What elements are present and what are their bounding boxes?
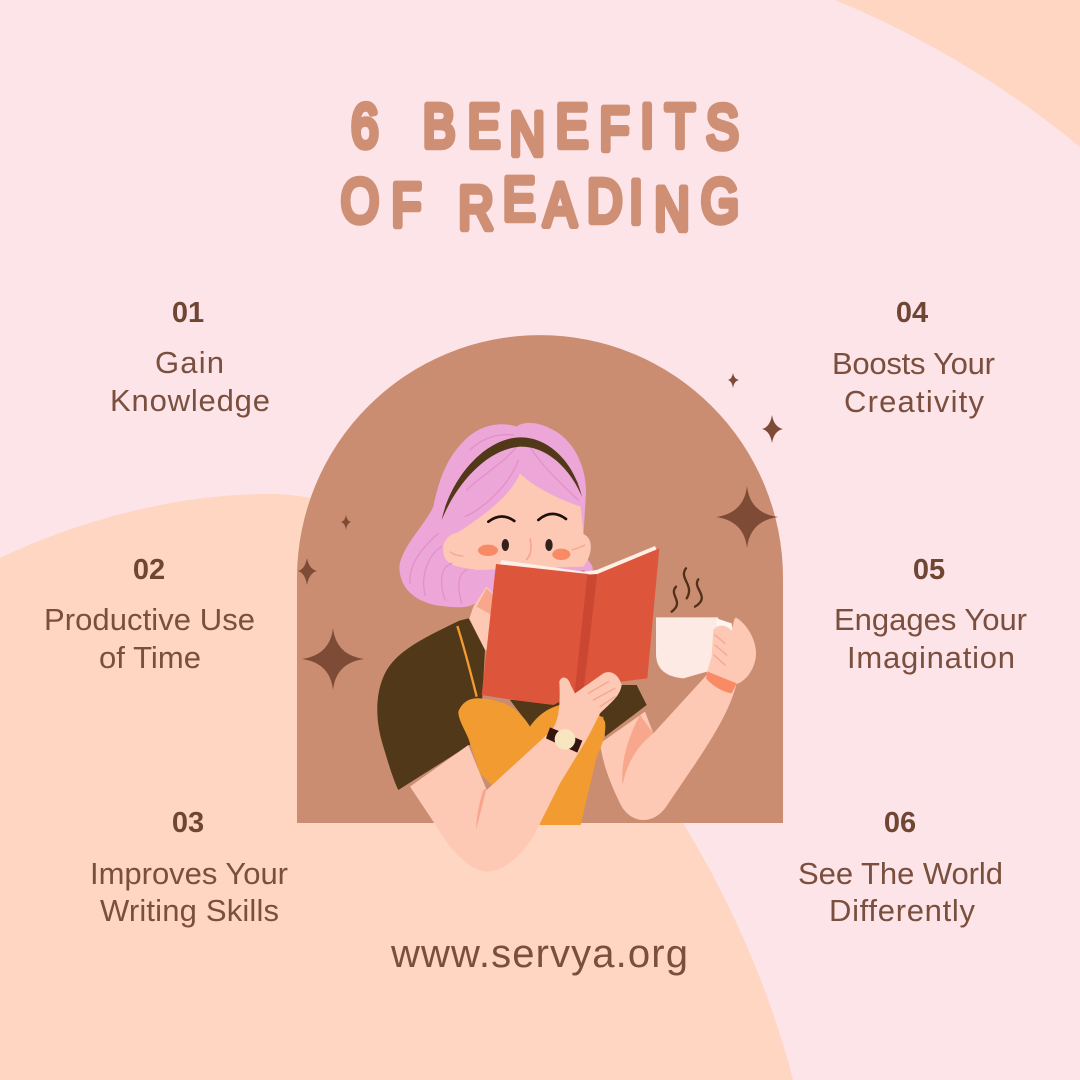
right arm shadow <box>622 715 653 785</box>
necklace strap <box>457 626 477 697</box>
benefit 04: Creativity <box>844 384 984 419</box>
benefit 05: Imagination <box>847 640 1015 675</box>
benefit 02 <box>44 554 255 675</box>
background shape: top right corner <box>835 0 1080 147</box>
benefit 02: of Time <box>99 640 201 675</box>
benefit 03: Writing Skills <box>100 893 279 928</box>
neck <box>469 587 503 653</box>
background shape: bottom left blob <box>0 494 793 1080</box>
right arm <box>600 675 737 820</box>
website url: www.servya.org <box>390 932 688 976</box>
benefit 03: Improves Your <box>90 856 288 891</box>
benefit 01: Gain <box>155 345 224 380</box>
shirt <box>377 618 647 790</box>
benefit 05: 05 <box>913 554 945 586</box>
headband <box>442 437 582 520</box>
eyes and cheeks <box>450 514 585 560</box>
illustration: woman reading a book <box>377 423 756 872</box>
benefit 03 <box>90 807 288 928</box>
left arm and hand <box>410 672 622 872</box>
right hand <box>706 617 756 693</box>
orange top <box>458 698 605 825</box>
benefit 05: Engages Your <box>834 602 1027 637</box>
benefit 04: Boosts Your <box>832 346 995 381</box>
benefit 06: See The World <box>798 856 1003 891</box>
cup <box>656 617 733 678</box>
benefit 01: 01 <box>172 297 204 329</box>
benefit 01 <box>110 297 270 418</box>
benefit 04: 04 <box>896 297 928 329</box>
benefit 03: 03 <box>172 807 204 839</box>
face <box>443 473 591 570</box>
panel: arch <box>297 335 783 823</box>
benefit 04 <box>832 297 995 419</box>
hair strands <box>410 435 578 603</box>
benefit 05 <box>834 554 1027 675</box>
benefit 06: 06 <box>884 807 916 839</box>
benefit 02: 02 <box>133 554 165 586</box>
steam <box>672 568 702 612</box>
sparkles <box>298 373 783 690</box>
book <box>482 546 659 705</box>
benefit 01: Knowledge <box>110 383 270 418</box>
hair <box>399 423 593 607</box>
benefit 06: Differently <box>829 893 976 928</box>
benefit 02: Productive Use <box>44 602 255 637</box>
benefit 06 <box>798 807 1003 928</box>
watch <box>546 727 582 753</box>
